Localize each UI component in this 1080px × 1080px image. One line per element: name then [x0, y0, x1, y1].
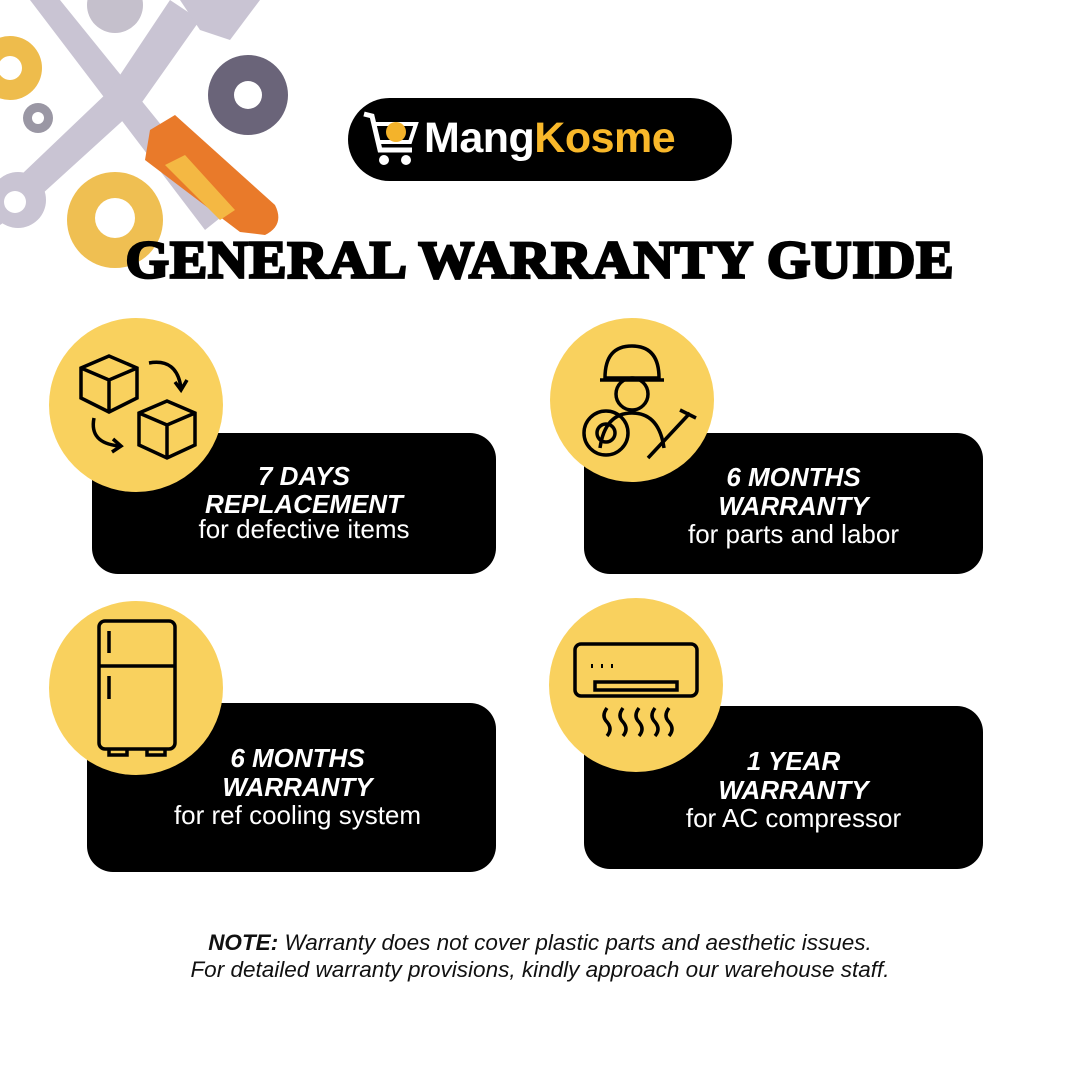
icon circle: technician: [550, 318, 714, 482]
icon circle: refrigerator: [49, 601, 223, 775]
card: 1 year AC: 1 YEAR: [747, 746, 840, 776]
card: 6 months parts and labor: WARRANTY: [718, 491, 869, 521]
icon circle: boxes exchange: [49, 318, 223, 492]
note: [190, 930, 890, 982]
icon: cart: [363, 112, 419, 165]
card: 6 months parts and labor: for parts and labor: [688, 519, 899, 549]
card: 6 months parts and labor: [584, 433, 983, 574]
card: 6 months ref cooling: [87, 703, 496, 872]
card: 1 year AC: for AC compressor: [686, 803, 901, 833]
logo: MangKosme: [424, 114, 675, 162]
card: 1 year AC: WARRANTY: [718, 775, 869, 805]
card: 6 months ref cooling: for ref cooling system: [174, 800, 421, 830]
logo: [348, 98, 732, 181]
title: GENERAL WARRANTY GUIDE: [126, 230, 954, 289]
card: 7 days replacement: for defective items: [198, 514, 409, 544]
card: 6 months ref cooling: 6 MONTHS: [230, 743, 365, 773]
note: NOTE: Warranty does not cover plastic parts and aesthetic issues.: [208, 930, 872, 955]
card: 6 months ref cooling: WARRANTY: [222, 772, 373, 802]
card: 7 days replacement: 7 DAYS: [258, 461, 350, 491]
card: 1 year AC: [584, 706, 983, 869]
card: 7 days replacement: REPLACEMENT: [205, 489, 403, 519]
icon circle: air conditioner: [549, 598, 723, 772]
note: For detailed warranty provisions, kindly approach our warehouse staff.: [190, 957, 890, 982]
decoration: tools and gears: [0, 0, 288, 268]
card: 7 days replacement: [92, 433, 496, 574]
card: 6 months parts and labor: 6 MONTHS: [726, 462, 861, 492]
